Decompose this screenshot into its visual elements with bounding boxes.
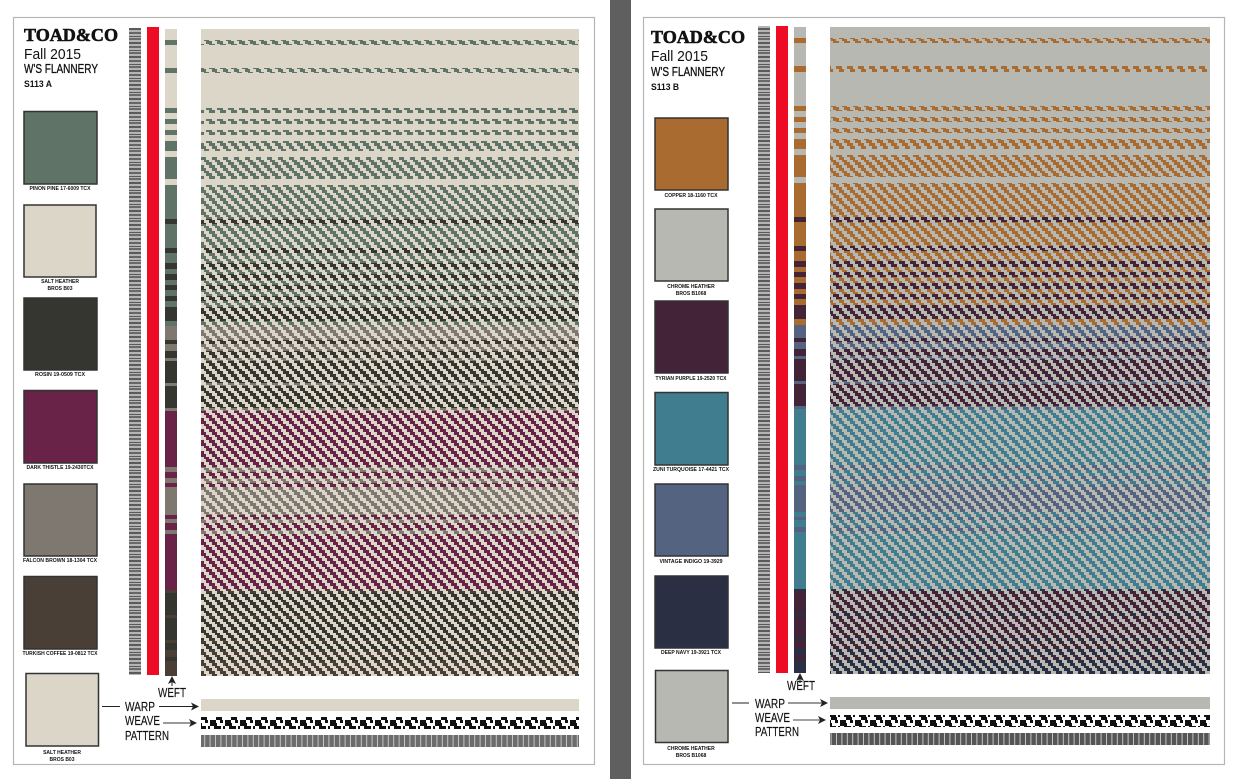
- swatch: salt heather: [24, 205, 96, 292]
- swatch: dark thistle: DARK THISTLE 19-2430TCX: [26, 465, 94, 471]
- swatch: vintage indigo: VINTAGE INDIGO 19-3929: [660, 559, 723, 565]
- logo B: TOAD&CO: [651, 27, 745, 47]
- callouts A: [102, 677, 198, 743]
- callouts B: [732, 674, 827, 739]
- style name A: W'S FLANNERY: [24, 62, 99, 76]
- warp draft strip A: [129, 28, 141, 675]
- threading bar A: [201, 735, 579, 747]
- connector: swatch to warp: [102, 706, 120, 708]
- style code B: S113 B: [651, 82, 679, 93]
- panel border A: [14, 18, 594, 764]
- swatch: turkish coffee: TURKISH COFFEE 19-0812 TCX: [22, 651, 98, 657]
- weave label: WEAVE: [125, 713, 160, 728]
- fabric weave simulation A: [201, 29, 579, 676]
- swatch: warp salt heather: SALT HEATHER: [43, 750, 81, 756]
- swatch: zuni turquoise: ZUNI TURQUOISE 17-4421 TCX: [653, 467, 730, 473]
- panel: colorway S113 B: [644, 18, 1224, 764]
- style code A: S113 A: [24, 79, 52, 90]
- swatch: deep navy: DEEP NAVY 19-3921 TCX: [661, 650, 722, 656]
- swatch: salt heather: BROS B03: [47, 286, 73, 292]
- swatch: warp salt heather: [26, 674, 98, 763]
- panel border B: [644, 18, 1224, 764]
- arrow: weave: [163, 722, 196, 724]
- warp label: WARP: [755, 696, 785, 711]
- red tie-up strip B: [776, 26, 788, 673]
- swatch: warp salt heather: BROS B03: [49, 757, 75, 763]
- threading bar B: [830, 733, 1210, 745]
- swatch: warp chrome heather: BROS B1068: [676, 753, 706, 759]
- swatch: chrome heather: CHROME HEATHER: [667, 284, 715, 290]
- header A: [24, 25, 118, 90]
- swatch: chrome heather: BROS B1068: [676, 291, 706, 297]
- weft colour strip B: [794, 27, 806, 673]
- season A: Fall 2015: [24, 46, 81, 63]
- swatch: zuni turquoise: [653, 392, 730, 473]
- weave pattern band A: [201, 717, 579, 729]
- swatch: deep navy: [655, 576, 728, 656]
- arrow: weft: [799, 674, 801, 683]
- swatch: copper: COPPER 18-1160 TCX: [664, 193, 718, 199]
- pattern label: PATTERN: [755, 724, 799, 739]
- swatch: vintage indigo: [655, 484, 728, 565]
- warp label: WARP: [125, 699, 155, 714]
- warp draft strip B: [758, 26, 770, 673]
- swatch: dark thistle: [24, 390, 97, 471]
- header B: [651, 27, 745, 93]
- season B: Fall 2015: [651, 48, 708, 65]
- swatch: falcon brown: FALCON BROWN 18-1304 TCX: [23, 558, 98, 564]
- arrow: warp: [788, 702, 827, 704]
- swatch: falcon brown: [23, 484, 98, 564]
- swatch: rosin: ROSIN 19-0509 TCX: [35, 372, 86, 378]
- swatch: warp chrome heather: CHROME HEATHER: [667, 746, 715, 752]
- swatch: tyrian purple: TYRIAN PURPLE 19-2520 TCX: [656, 376, 727, 382]
- pattern label: PATTERN: [125, 728, 169, 743]
- warp colour bar B: [830, 697, 1210, 709]
- swatches B: [653, 118, 730, 759]
- divider band between sheets: [610, 0, 631, 779]
- swatch: tyrian purple: [655, 301, 728, 382]
- weft colour strip A: [165, 29, 177, 676]
- swatch: copper: [655, 118, 728, 199]
- panel: colorway S113 A: [14, 18, 594, 764]
- weft label: WEFT: [158, 685, 186, 700]
- weave label: WEAVE: [755, 710, 790, 725]
- swatch: rosin: [24, 298, 97, 378]
- logo A: TOAD&CO: [24, 25, 118, 45]
- swatches A: [22, 112, 98, 763]
- style name B: W'S FLANNERY: [651, 65, 726, 79]
- weave pattern band B: [830, 715, 1210, 727]
- swatch: chrome heather: [655, 209, 728, 297]
- arrow: weave: [793, 719, 825, 721]
- arrow: warp: [159, 706, 198, 708]
- swatch: pinon pine: [24, 112, 97, 192]
- swatch: warp chrome heather: [656, 670, 728, 759]
- red tie-up strip A: [147, 27, 159, 675]
- weft label: WEFT: [787, 678, 815, 693]
- fabric weave simulation B: [830, 27, 1210, 674]
- swatch: pinon pine: PINON PINE 17-6009 TCX: [30, 186, 91, 192]
- warp colour bar A: [201, 699, 579, 711]
- connector: swatch to warp: [732, 702, 749, 704]
- swatch: salt heather: SALT HEATHER: [41, 279, 79, 285]
- swatch: turkish coffee: [22, 576, 98, 657]
- arrow: weft: [171, 677, 173, 686]
